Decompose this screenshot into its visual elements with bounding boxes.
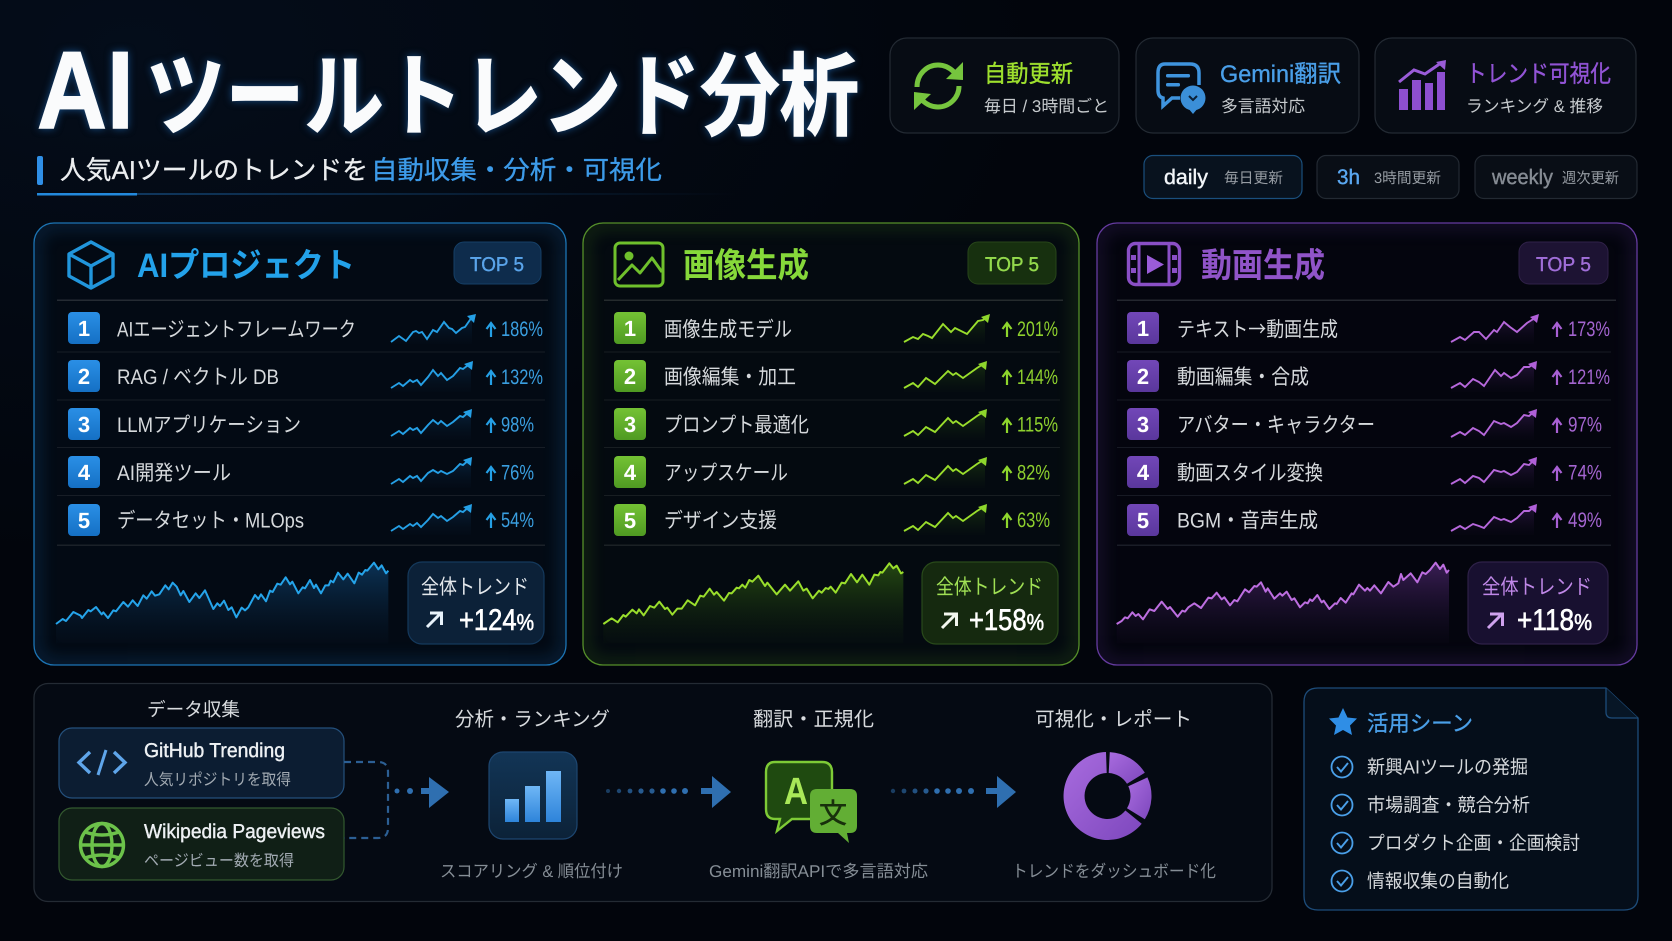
- row 3: 97%: [1568, 414, 1602, 436]
- step: visualization: 可視化・レポート: [1035, 709, 1192, 731]
- row 5: データセット・MLOps: [117, 510, 304, 532]
- row 5: 5: [1137, 508, 1149, 533]
- row 5: デザイン支援: [664, 510, 777, 532]
- row 4: [614, 456, 1050, 488]
- chip: weekly: [1475, 156, 1637, 198]
- row 1: テキスト→動画生成: [1177, 314, 1338, 344]
- badge: top 5: TOP 5: [470, 254, 524, 276]
- arrow: to translation: [606, 776, 731, 808]
- subtitle: 人気AIツールのトレンドを: [60, 155, 368, 185]
- row 1: 画像生成モデル: [664, 318, 792, 342]
- list item 2: 市場調査・競合分析: [1367, 794, 1530, 816]
- row 1: 186%: [501, 318, 543, 341]
- step: analysis and ranking: 分析・ランキング: [455, 709, 610, 731]
- heading: 動画生成: [1201, 247, 1325, 285]
- heading: 画像生成: [683, 247, 809, 285]
- row 3: [1127, 408, 1602, 440]
- row 1: [1127, 312, 1610, 344]
- callout: overall trend: +158%: [969, 604, 1044, 637]
- row 4: 4: [1137, 460, 1150, 485]
- row 4: [68, 456, 534, 488]
- row 4: 82%: [1017, 462, 1050, 484]
- row 2: 2: [624, 364, 636, 389]
- row 1: 201%: [1017, 318, 1058, 341]
- badge: top 5: [1519, 242, 1608, 284]
- connector: sources merge: [344, 762, 388, 838]
- row 4: アップスケール: [664, 462, 788, 485]
- step: visualization: [1012, 709, 1216, 881]
- list item 4: 情報収集の自動化: [1367, 872, 1509, 892]
- row 2: 動画編集・合成: [1177, 366, 1309, 389]
- row 5: 49%: [1568, 509, 1602, 532]
- row 3: LLMアプリケーション: [117, 414, 301, 437]
- chip: weekly: weekly: [1491, 166, 1553, 189]
- icon: bar chart with arrow: [1399, 60, 1446, 110]
- list item 3: プロダクト企画・企画検討: [1367, 832, 1580, 854]
- row 3: 98%: [501, 414, 534, 436]
- step: translation: [709, 709, 928, 881]
- chip: weekly: 週次更新: [1562, 170, 1619, 187]
- source: GitHub Trending: 人気リポジトリを取得: [144, 771, 291, 789]
- row 5: 5: [78, 508, 90, 533]
- callout: overall trend: 全体トレンド: [936, 576, 1043, 599]
- row 3: 115%: [1017, 414, 1058, 436]
- source: GitHub Trending: GitHub Trending: [144, 740, 285, 762]
- icon: picture: [615, 243, 663, 286]
- row 2: RAG / ベクトル DB: [117, 366, 279, 389]
- step: translation: A: [784, 771, 808, 813]
- row 5: BGM・音声生成: [1177, 510, 1318, 532]
- row 2: 2: [1137, 364, 1149, 389]
- row 1: 1: [624, 316, 636, 341]
- chart: overall trend: [1117, 563, 1449, 643]
- badge: top 5: [454, 242, 541, 284]
- chip: daily: [1144, 156, 1302, 198]
- callout: overall trend: [1468, 562, 1608, 644]
- panel: pipeline: [34, 684, 1272, 902]
- panel: use cases: [1304, 688, 1638, 910]
- source: GitHub Trending: [59, 728, 344, 798]
- row 5: [614, 504, 1050, 536]
- icon: chat bubbles: [1158, 64, 1206, 114]
- row 5: [1127, 504, 1602, 536]
- chip: 3h: 3h: [1337, 166, 1360, 189]
- step: translation: 文: [819, 798, 847, 829]
- arrow: to visualization: [891, 776, 1016, 808]
- row 3: [68, 408, 534, 440]
- row 3: アバター・キャラクター: [1177, 414, 1375, 437]
- panel: AI projects: [34, 223, 566, 665]
- row 5: 63%: [1017, 509, 1050, 532]
- badge: top 5: TOP 5: [1536, 254, 1591, 276]
- row 1: [68, 312, 543, 344]
- callout: overall trend: 全体トレンド: [421, 576, 529, 599]
- row 1: 173%: [1568, 318, 1610, 341]
- icon: star: [1329, 708, 1357, 735]
- row 2: 144%: [1017, 366, 1058, 389]
- heading: トレンド可視化: [1466, 61, 1611, 88]
- row 3: 3: [1137, 412, 1149, 437]
- description: 多言語対応: [1221, 97, 1305, 116]
- feature card: Gemini translation: [1136, 38, 1359, 133]
- row 1: 1: [78, 316, 90, 341]
- row 5: 5: [624, 508, 636, 533]
- source: Wikipedia Pageviews: ページビュー数を取得: [144, 852, 294, 870]
- heading: 自動更新: [984, 61, 1073, 88]
- subtitle: [37, 155, 737, 196]
- row 2: 画像編集・加工: [664, 366, 796, 389]
- row 1: 1: [1137, 316, 1149, 341]
- row 2: [68, 360, 543, 392]
- row 2: [614, 360, 1058, 392]
- row 4: 4: [624, 460, 637, 485]
- row 3: [614, 408, 1058, 440]
- chip: daily: 毎日更新: [1224, 170, 1283, 187]
- icon: refresh: [914, 62, 963, 110]
- chip: 3h: 3時間更新: [1374, 170, 1441, 187]
- arrow: to analysis: [394, 777, 449, 808]
- feature card: trend visualization: [1375, 38, 1636, 133]
- step: analysis and ranking: [440, 709, 623, 881]
- list item 1: 新興AIツールの発掘: [1367, 758, 1528, 778]
- row 4: 74%: [1568, 462, 1602, 484]
- row 4: 76%: [501, 462, 534, 484]
- chart: overall trend: [56, 563, 388, 643]
- feature card: auto update: [890, 38, 1119, 133]
- heading: data collection: データ収集: [147, 699, 240, 721]
- row 3: プロンプト最適化: [664, 414, 809, 437]
- step: analysis and ranking: スコアリング & 順位付け: [440, 862, 623, 881]
- callout: overall trend: +124%: [459, 604, 534, 637]
- chip: daily: daily: [1164, 166, 1208, 189]
- row 4: 4: [78, 460, 91, 485]
- callout: overall trend: 全体トレンド: [1482, 576, 1592, 599]
- row 2: 132%: [501, 366, 543, 389]
- source: Wikipedia Pageviews: Wikipedia Pageviews: [144, 821, 325, 843]
- row 1: AIエージェントフレームワーク: [117, 318, 356, 342]
- row 4: 動画スタイル変換: [1177, 462, 1323, 485]
- heading: AIプロジェクト: [137, 247, 355, 285]
- description: ランキング & 推移: [1466, 97, 1603, 116]
- badge: top 5: [968, 242, 1056, 284]
- icon: film: [1128, 244, 1180, 284]
- callout: overall trend: [922, 562, 1058, 644]
- badge: top 5: TOP 5: [985, 254, 1039, 276]
- row 2: 2: [78, 364, 90, 389]
- chip: 3h: [1317, 156, 1459, 198]
- heading: Gemini翻訳: [1220, 61, 1341, 88]
- row 5: [68, 504, 534, 536]
- panel: image generation: [583, 223, 1079, 665]
- icon: cube: [69, 242, 113, 288]
- heading: 活用シーン: [1367, 711, 1473, 736]
- row 3: 3: [78, 412, 90, 437]
- chart: overall trend: [603, 563, 903, 643]
- row 5: 54%: [501, 509, 534, 532]
- subtitle: 自動収集・分析・可視化: [371, 155, 662, 185]
- row 1: [614, 312, 1058, 344]
- step: visualization: トレンドをダッシュボード化: [1012, 862, 1216, 881]
- callout: overall trend: +118%: [1517, 604, 1592, 637]
- description: 毎日 / 3時間ごと: [984, 97, 1109, 116]
- panel: video generation: [1097, 223, 1637, 665]
- callout: overall trend: [408, 562, 544, 644]
- row 4: [1127, 456, 1602, 488]
- step: translation: Gemini翻訳APIで多言語対応: [709, 862, 928, 881]
- row 3: 3: [624, 412, 636, 437]
- row 2: [1127, 360, 1610, 392]
- source: Wikipedia Pageviews: [59, 808, 344, 880]
- row 2: 121%: [1568, 366, 1610, 389]
- title: AIツールトレンド分析: [37, 29, 859, 152]
- step: translation: 翻訳・正規化: [753, 709, 874, 731]
- row 4: AI開発ツール: [117, 462, 231, 485]
